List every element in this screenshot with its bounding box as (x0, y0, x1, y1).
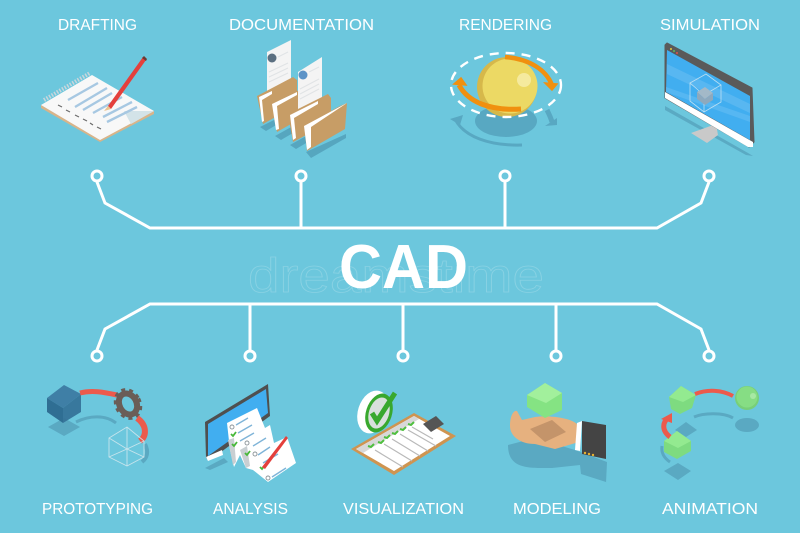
label: visualization: VISUALIZATION (343, 501, 464, 518)
label: modeling: MODELING (513, 501, 601, 518)
resume sheet: front (298, 57, 322, 118)
folder 1 (257, 77, 297, 124)
icon: drafting notepad and pencil (41, 56, 154, 142)
folder 2 (271, 85, 312, 132)
resume sheet: back (267, 40, 291, 100)
green cube: bottom (664, 431, 691, 459)
connector lines: bottom (92, 304, 714, 361)
label: simulation: SIMULATION (660, 17, 760, 34)
label: prototyping: PROTOTYPING (42, 501, 153, 518)
checklist paper (227, 408, 296, 482)
icon: modeling hand with cube (508, 383, 607, 483)
label: drafting: DRAFTING (58, 17, 137, 34)
title: CAD: CAD (339, 233, 468, 302)
green cube (527, 383, 562, 418)
icon: rendering sphere with arrows (450, 53, 561, 145)
watermark: dreamstime (248, 250, 544, 303)
label: analysis: ANALYSIS (213, 501, 288, 518)
label: rendering: RENDERING (459, 17, 552, 34)
icon: animation cubes and sphere (661, 386, 759, 480)
icon: simulation monitor (665, 43, 754, 156)
icon: prototyping cube, gear and wireframe (47, 385, 147, 466)
folder 3 (288, 94, 331, 142)
label: documentation: DOCUMENTATION (229, 17, 374, 34)
label: animation: ANIMATION (662, 501, 758, 518)
green cube: top (669, 386, 696, 414)
folder 4 (304, 103, 347, 151)
connector lines: top (92, 171, 714, 228)
icon: visualization clipboard with check badge (351, 386, 456, 475)
icon: analysis monitor and checklist (205, 384, 296, 482)
icon: documentation folders (257, 40, 347, 158)
